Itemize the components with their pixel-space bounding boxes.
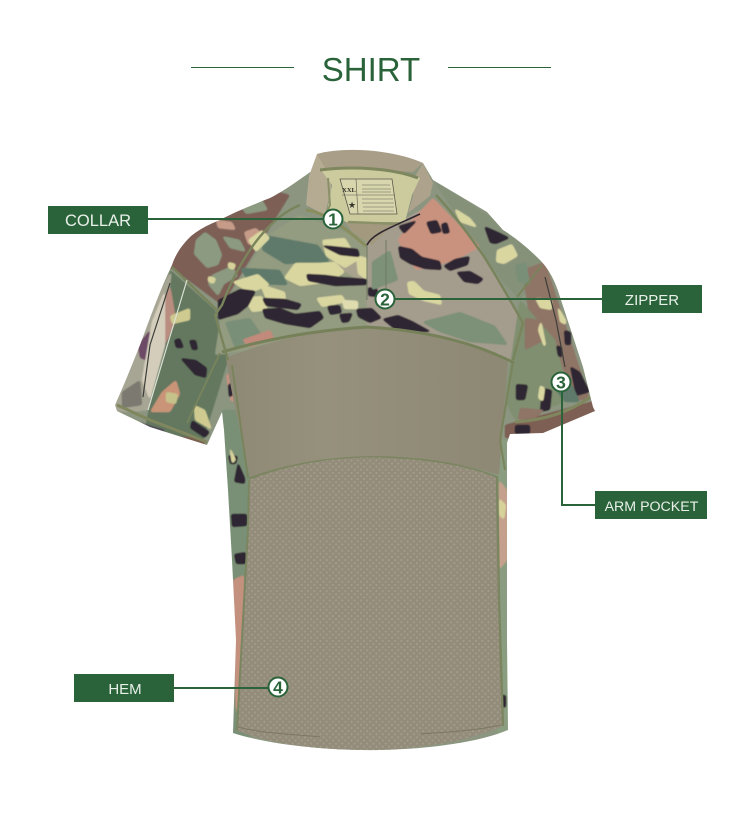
sleeve pocket zips	[143, 277, 565, 410]
callout 3: arm pocket: 3	[556, 372, 566, 392]
callout 2: zipper: ZIPPER	[625, 292, 679, 309]
side panel patches	[226, 373, 234, 402]
callout 4: hem: HEM	[108, 681, 142, 698]
shoulder and right sleeve patches	[496, 244, 518, 264]
callout 2: zipper	[376, 285, 702, 313]
callout 1: collar: 1	[328, 210, 338, 230]
callout 3: arm pocket: ARM POCKET	[605, 499, 699, 515]
garment size tag	[340, 179, 397, 214]
callout 2: zipper: 2	[380, 290, 390, 310]
shirt illustration	[100, 140, 610, 760]
garment size tag: ★	[348, 200, 356, 210]
callout 4: hem	[74, 674, 288, 702]
garment size tag: XXL	[342, 187, 357, 194]
callout 1: collar: COLLAR	[65, 212, 131, 230]
right chest patches	[398, 198, 480, 270]
camo base zones	[170, 192, 290, 302]
collar	[306, 150, 433, 300]
chest tan panel	[222, 327, 514, 479]
callout 4: hem: 4	[273, 678, 283, 698]
callout 3: arm pocket	[552, 372, 707, 519]
shirt camouflage body	[115, 163, 595, 750]
left sleeve patches	[164, 288, 176, 344]
left shoulder patches	[194, 232, 222, 268]
mesh lower panel	[230, 455, 510, 755]
title: SHIRT	[322, 51, 420, 88]
raglan seams	[117, 195, 590, 478]
callout 1: collar	[48, 206, 342, 234]
chest cream and dark patches	[262, 235, 330, 264]
